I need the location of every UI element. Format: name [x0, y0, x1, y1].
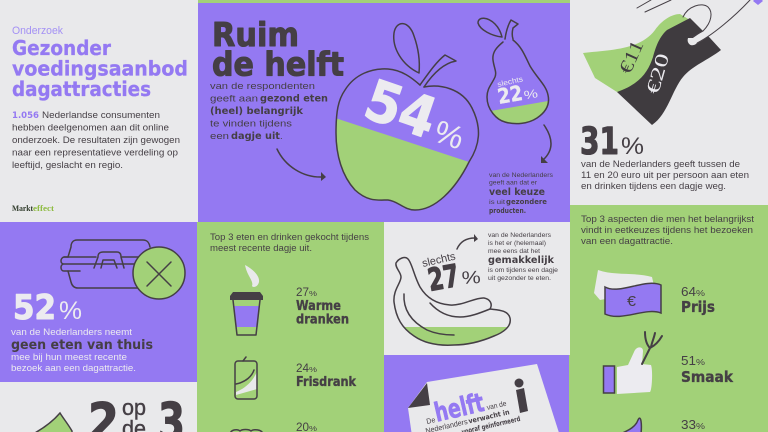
panel: 2 op de 3 — [0, 382, 198, 432]
icon: apple 54%: % — [430, 113, 469, 156]
panel: top 3 aspects — [570, 205, 768, 432]
text: gemakkelijk: is om tijdens een dagje — [488, 267, 558, 274]
item: Warme dranken: Warme — [296, 298, 341, 314]
item: Warme dranken — [296, 287, 349, 328]
icon: bills in hand: €11 — [615, 37, 648, 77]
item: Prijs — [681, 284, 715, 316]
stat: 31%: % — [621, 133, 644, 160]
item: 20% — [296, 422, 317, 432]
icon: apple 54%: 54 — [356, 68, 445, 152]
stat: 31%: 31 — [580, 120, 619, 163]
text: respondents: dagje uit — [231, 131, 280, 142]
icon: soda can — [235, 357, 257, 399]
text: respondents: te vinden tijdens — [210, 118, 292, 130]
heading: Ruim de helft: Ruim — [212, 15, 299, 54]
text: De helft: verwacht in — [468, 408, 510, 425]
text: gemakkelijk: uit gezonder te eten. — [488, 275, 551, 282]
intro text: naar een representatieve verdeling op — [12, 148, 178, 158]
icon: pear 22% — [478, 18, 552, 130]
icon: pear 22%: slechts — [496, 74, 524, 89]
item: Warme dranken: dranken — [296, 312, 349, 328]
text: respondents: (heel) belangrijk — [210, 106, 304, 117]
arrow: to apple — [277, 149, 326, 181]
item: Prijs: 64 — [681, 284, 696, 299]
item: Smaak: % — [696, 358, 705, 367]
text: gemakkelijk: is het er (helemaal) — [488, 240, 546, 247]
heading: Ruim de helft — [212, 15, 344, 84]
item: Frisdrank: 24 — [296, 363, 310, 375]
intro text: hebben deelgenomen aan dit online — [12, 122, 169, 132]
stat: 52%: % — [59, 297, 82, 325]
icon: euro bill — [594, 270, 661, 316]
text: gemakkelijk: mee eens dat het — [488, 248, 540, 255]
text: 31% description — [581, 159, 749, 192]
icon: paper note — [408, 364, 560, 432]
title: dagattracties — [12, 77, 151, 101]
text: aspects intro: vindt in eetkeuzes tijdens het bezoeken — [581, 225, 753, 236]
item: Warme dranken: 27 — [296, 287, 309, 299]
icon: pear 22%: 22 — [496, 81, 524, 109]
text: aspects intro: van een dagattractie. — [581, 236, 673, 247]
panel: top 3 food and drinks — [198, 222, 384, 432]
icon: lunchbox crossed out — [61, 240, 185, 299]
text: aspects intro — [581, 214, 754, 247]
intro text: Nederlandse consumenten — [42, 110, 160, 120]
text: respondents: geeft aan — [210, 94, 258, 104]
panel: 52% no food from home — [0, 222, 198, 382]
text: food intro: Top 3 eten en drinken gekocht tijdens — [210, 232, 370, 242]
panel: introduction — [0, 0, 198, 222]
text: veel keuze — [489, 172, 554, 215]
panel: 31% spend — [570, 0, 768, 205]
text: 52% description: bezoek aan een dagattractie. — [11, 363, 136, 374]
divider lines — [197, 222, 198, 432]
item: Frisdrank: % — [309, 367, 317, 374]
icon: euro bill: € — [627, 293, 637, 310]
text: gemakkelijk: van de Nederlanders — [488, 232, 552, 239]
text: 31% description: 11 en 20 euro uit per persoon aan eten — [581, 170, 749, 181]
text: De helft: van de — [486, 399, 507, 412]
intro text: leeftijd, geslacht en regio. — [12, 160, 123, 170]
item: 33%: % — [696, 422, 705, 431]
text: veel keuze: producten. — [489, 207, 526, 215]
stat: slechts 27%: 27 — [425, 258, 462, 299]
text: respondents: . — [280, 131, 283, 142]
text: gemakkelijk: gemakkelijk — [488, 255, 554, 266]
logo: Markteffect: Markt — [12, 204, 33, 213]
item: Smaak — [681, 353, 734, 386]
icon: third aspect — [620, 418, 641, 432]
item: Smaak: 51 — [681, 353, 696, 368]
eyebrow: Onderzoek: Onderzoek — [12, 25, 63, 37]
stat: 52%: 52 — [13, 288, 56, 328]
heading: Ruim de helft: de helft — [212, 44, 344, 84]
text: veel keuze: veel keuze — [489, 187, 545, 198]
text: De helft: De — [425, 415, 436, 426]
icon: banana — [393, 256, 511, 346]
text: veel keuze: is uit — [489, 199, 505, 206]
text: 52% description: van de Nederlanders neemt — [11, 327, 132, 338]
text: 31% description: en drinken tijdens een dagje weg. — [581, 181, 726, 192]
icon: bills in hand: €20 — [643, 51, 674, 96]
stat: slechts 27%: % — [461, 267, 481, 288]
text: food intro — [210, 232, 370, 253]
stat: 2 op de 3: op — [122, 395, 146, 420]
text: De helft: helft — [432, 388, 487, 429]
text: 52% description: mee bij hun meest recente — [11, 352, 127, 363]
logo: Markteffect: effect — [33, 204, 54, 213]
icon: coffee cup — [230, 265, 263, 335]
intro text — [12, 110, 180, 170]
item: 33% — [681, 417, 705, 432]
icon: apple 54% — [335, 22, 480, 211]
arrow: pear to text — [541, 125, 551, 163]
panel: information note — [384, 355, 570, 432]
stat: slechts 27%: slechts — [421, 250, 457, 270]
item: Warme dranken: % — [309, 291, 317, 298]
item: Prijs: Prijs — [681, 298, 715, 316]
item: Smaak: Smaak — [681, 368, 734, 386]
text: veel keuze: van de Nederlanders — [489, 172, 554, 179]
panel: apple and pear — [198, 0, 570, 222]
panel: banana 27% — [393, 232, 558, 346]
text: gemakkelijk — [488, 232, 558, 282]
icon: bills in hand — [583, 0, 763, 125]
text: respondents: gezond eten — [260, 94, 328, 104]
intro text: onderzoek. De resultaten zijn gewogen — [12, 135, 180, 145]
text: respondents: van de respondenten — [210, 81, 315, 92]
icon: megaphone — [33, 413, 72, 432]
title: Gezonder — [12, 36, 111, 60]
text: 31% description: van de Nederlanders geeft tussen de — [581, 159, 740, 170]
text: aspects intro: Top 3 aspecten die men het belangrijkst — [581, 214, 754, 225]
item: Prijs: % — [696, 289, 705, 298]
arrow: banana to text — [457, 234, 478, 249]
item: 33%: 33 — [681, 417, 696, 432]
text: respondents — [210, 81, 328, 142]
text: De helft — [419, 381, 521, 432]
text: veel keuze: geeft aan dat er — [489, 180, 538, 186]
stat: 52% — [13, 288, 82, 328]
text: respondents: een — [210, 131, 229, 142]
icon: thumb with fork — [604, 332, 662, 394]
icon: third food item — [230, 430, 263, 432]
text: 52% description — [11, 327, 153, 374]
title — [12, 36, 188, 101]
icon: pear 22%: % — [523, 86, 539, 102]
item: Frisdrank — [296, 363, 357, 390]
intro text: 1.056 — [12, 111, 39, 121]
text: food intro: meest recente dagje uit. — [210, 243, 312, 253]
text: 52% description: geen eten van thuis — [11, 338, 153, 353]
item: Frisdrank: Frisdrank — [296, 374, 357, 390]
text: veel keuze: gezondere — [506, 198, 547, 206]
title: voedingsaanbod — [12, 56, 188, 80]
logo: Markteffect — [12, 204, 54, 213]
stat: 2 op de 3 — [88, 393, 185, 432]
